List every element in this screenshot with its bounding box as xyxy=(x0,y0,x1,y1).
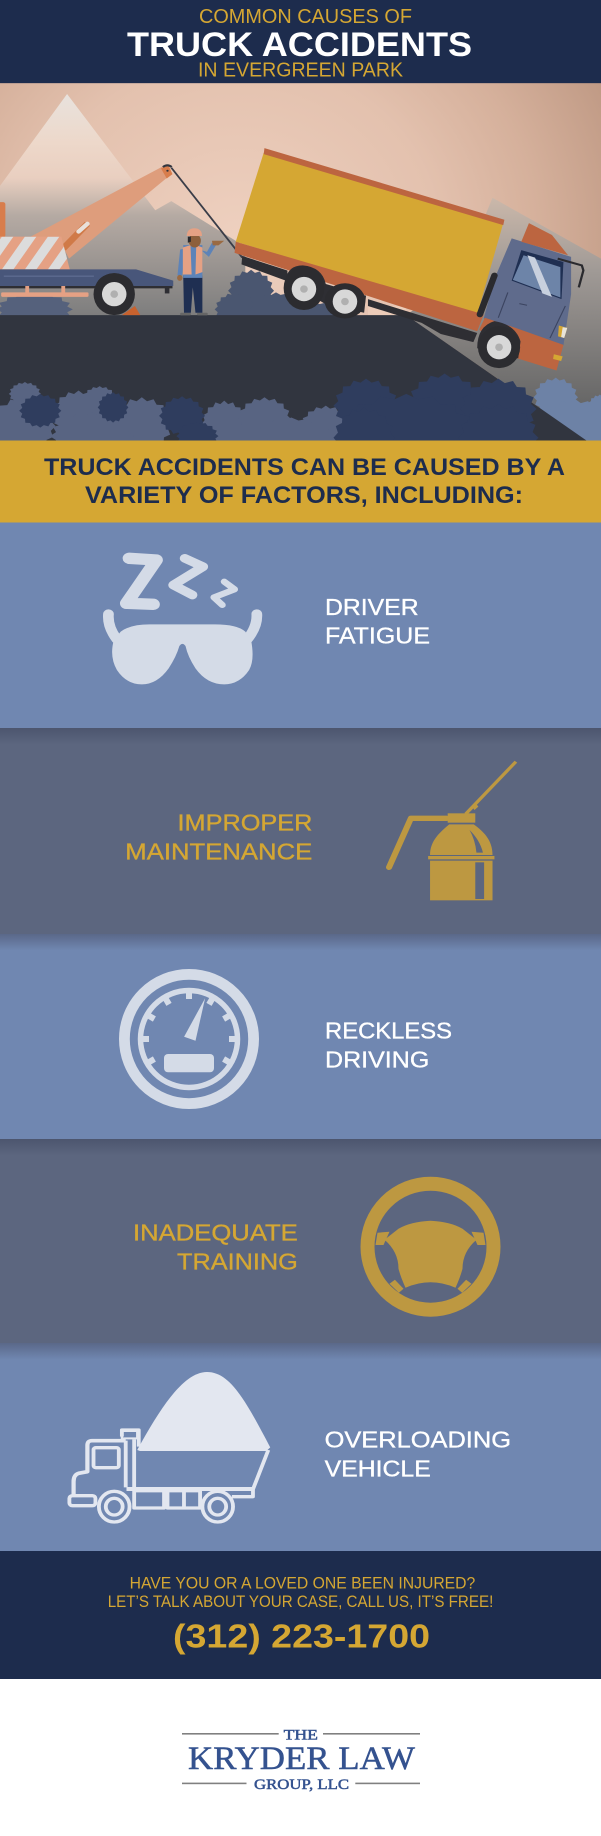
illustration: tow truck recovering a truck on a slope xyxy=(0,83,601,472)
law firm logo: KRYDER LAW xyxy=(188,1741,416,1777)
panel: overloading vehicle xyxy=(0,1343,601,1551)
label: inadequate training: TRAINING xyxy=(177,1248,298,1274)
wheels xyxy=(286,265,366,313)
label: improper maintenance: IMPROPER xyxy=(178,810,312,836)
header banner xyxy=(0,0,601,84)
call to action line 2: LET’S TALK ABOUT YOUR CASE, CALL US, IT’S FREE! xyxy=(108,1593,493,1611)
tow cable xyxy=(171,168,242,258)
label: driver fatigue xyxy=(325,594,430,649)
cab xyxy=(484,238,571,345)
label: overloading vehicle: VEHICLE xyxy=(325,1455,431,1481)
label: inadequate training: INADEQUATE xyxy=(133,1220,298,1246)
panel: driver fatigue xyxy=(0,522,601,728)
label: reckless driving xyxy=(325,1018,452,1072)
subheading line 1: TRUCK ACCIDENTS CAN BE CAUSED BY A xyxy=(44,454,565,481)
label: inadequate training xyxy=(133,1220,298,1274)
law firm logo: THE xyxy=(284,1727,318,1743)
call to action line 1: HAVE YOU OR A LOVED ONE BEEN INJURED? xyxy=(130,1574,475,1592)
law firm logo: GROUP, LLC xyxy=(254,1777,349,1793)
call to action footer xyxy=(0,1551,601,1679)
phone number: (312) 223-1700 xyxy=(173,1617,430,1654)
icon: overloaded dump truck xyxy=(69,1372,270,1522)
crashed truck xyxy=(235,148,583,371)
foreground bushes xyxy=(0,382,342,440)
panel: reckless driving xyxy=(0,934,601,1139)
background bushes xyxy=(214,270,360,316)
icon: steering wheel xyxy=(368,1184,494,1310)
tow truck xyxy=(0,165,173,315)
label: improper maintenance xyxy=(125,810,312,864)
label: improper maintenance: MAINTENANCE xyxy=(125,838,312,864)
panel: improper maintenance xyxy=(0,728,601,934)
label: reckless driving: DRIVING xyxy=(325,1046,429,1072)
subheading line 2: VARIETY OF FACTORS, INCLUDING: xyxy=(85,482,523,509)
icon: speedometer xyxy=(124,974,254,1104)
label: overloading vehicle: OVERLOADING xyxy=(325,1426,511,1452)
worker xyxy=(177,228,224,315)
label: reckless driving: RECKLESS xyxy=(325,1018,452,1044)
title line: in evergreen park: IN EVERGREEN PARK xyxy=(198,59,404,81)
subheading band xyxy=(0,440,601,522)
cargo box xyxy=(236,153,503,314)
law firm logo xyxy=(182,1727,420,1793)
label: overloading vehicle xyxy=(325,1426,511,1481)
label: driver fatigue: DRIVER xyxy=(325,594,419,620)
panel: inadequate training xyxy=(0,1139,601,1343)
label: driver fatigue: FATIGUE xyxy=(325,623,430,649)
title: truck accidents: TRUCK ACCIDENTS xyxy=(127,26,472,64)
title line: common causes of: COMMON CAUSES OF xyxy=(199,6,412,28)
road and slope xyxy=(0,315,586,440)
icon: oil can xyxy=(389,762,516,900)
icon: sleeping mask xyxy=(108,558,257,684)
